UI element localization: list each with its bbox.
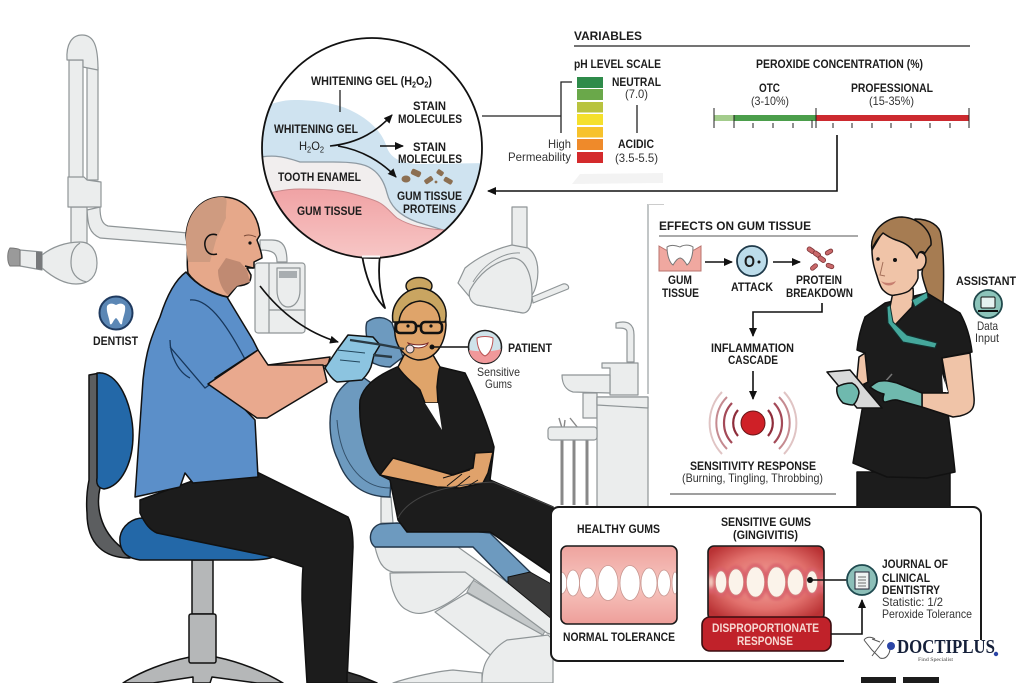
pH scale: (3.5-5.5) [615,151,658,165]
sensitive gums: RESPONSE [737,634,793,648]
panel: magnified callout of whitening gel: GUM TISSUE [297,204,362,218]
dentist icon and label [93,296,139,348]
background: x-ray arm and head [8,35,287,284]
peroxide concentration scale [714,57,969,128]
patient torso [360,367,553,575]
assistant tunic [853,293,972,478]
chair lower base [393,670,482,683]
patient head [395,298,446,360]
pH scale: High [548,137,571,151]
panel: magnified callout of whitening gel: TOOTH ENAMEL [278,170,361,184]
panel: gum comparison [551,507,981,661]
panel: magnified callout of whitening gel: O [311,139,320,153]
dentist instrument and mirror [350,340,404,357]
panel: magnified callout of whitening gel: STAIN [413,140,446,154]
peroxide concentration scale: PEROXIDE CONCENTRATION (%) [756,57,923,71]
peroxide concentration scale: (3-10%) [751,94,789,108]
panel: magnified callout of whitening gel: 2 [320,146,325,154]
pH scale [482,57,661,165]
bottom edge black blocks [861,677,939,683]
dentist icon and label: DENTIST [93,334,139,348]
logo: doctiplus [844,622,1024,683]
assistant label and icon [956,274,1017,345]
dentist figure [135,197,414,683]
sensitive gums: SENSITIVE GUMS [721,515,811,529]
sensitive gums [702,515,831,651]
arrow: concentration to callout [488,135,837,191]
assistant label and icon: Data [977,319,998,333]
arrow: box to mouth [260,286,338,342]
healthy gums: NORMAL TOLERANCE [563,630,675,644]
assistant pen [884,374,892,383]
icon: sensitivity waves [710,392,796,454]
text: inflammation cascade: CASCADE [728,353,778,367]
journal source: DENTISTRY [882,583,940,597]
callout: patient [430,330,553,391]
peroxide concentration scale: OTC [759,81,780,95]
pH scale: (7.0) [625,87,648,101]
chair headrest [366,318,403,367]
text: sensitivity response: SENSITIVITY RESPONSE [690,459,816,473]
icon: protein breakdown: PROTEIN [796,273,842,287]
cross-section layers [262,100,480,257]
badge: disproportionate response [702,617,831,651]
logo: doctiplus: Find Specialist [918,658,954,663]
sensitive gums: (GINGIVITIS) [733,528,798,542]
callout: patient: Gums [485,377,512,391]
assistant hair [872,217,931,258]
icon: protein breakdown [786,246,853,300]
chair backrest [330,375,395,497]
patient mouth [408,343,428,348]
assistant gloves [870,381,922,407]
protein particles [402,168,453,185]
panel: magnified callout of whitening gel: H [299,139,308,153]
text: sensitivity response [682,459,823,485]
patient chair [330,318,553,683]
patient glasses [396,322,442,333]
panel: effects on gum tissue [659,219,858,494]
dentist stool [87,373,283,683]
sensitive gums: DISPROPORTIONATE [712,621,819,635]
chair seat [370,523,530,582]
journal source: Peroxide Tolerance [882,607,972,621]
assistant trousers [857,472,950,509]
pH scale: NEUTRAL [612,75,661,89]
text: inflammation cascade [711,341,794,367]
assistant face [872,228,926,295]
dentist near arm [208,350,327,418]
assistant neck [890,288,913,325]
text: inflammation cascade: INFLAMMATION [711,341,794,355]
icon: gum and teeth: GUM [668,273,692,287]
panel: magnified callout of whitening gel: WHITENING GEL [274,122,358,136]
healthy gums: HEALTHY GUMS [577,522,660,536]
icon: gum and teeth [659,245,701,300]
dentist shirt [135,272,258,497]
stool backrest [97,373,133,489]
icon: protein breakdown: BREAKDOWN [786,286,853,300]
panel: magnified callout of whitening gel: STAIN [413,99,446,113]
heading: variables: VARIABLES [574,29,642,43]
icon: oxygen attack [731,246,773,294]
background: overhead dental lamp [458,173,663,313]
assistant label and icon: Input [975,331,1000,345]
patient arm and hands [380,452,493,488]
assistant label and icon: ASSISTANT [956,274,1017,288]
panel: magnified callout of whitening gel: MOLECULES [398,112,462,126]
dentist head [186,197,262,297]
journal source [807,557,972,634]
callout: patient: Sensitive [477,365,520,379]
dentist far arm [240,350,330,381]
healthy gums [555,522,678,644]
panel: magnified callout of whitening gel [255,38,490,308]
journal source: Statistic: 1/2 [882,595,943,609]
pH scale: pH LEVEL SCALE [574,57,661,71]
patient neck [398,353,440,403]
journal source: CLINICAL [882,571,930,585]
icon: oxygen attack: O [744,252,755,271]
panel: magnified callout of whitening gel: GUM TISSUE [397,189,462,203]
dentist trousers [140,472,353,683]
assistant left forearm [856,353,868,388]
panel: magnified callout of whitening gel: 2 [307,146,312,154]
callout: patient: PATIENT [508,341,553,355]
stool base [123,657,283,683]
callout labels: 2 [412,80,417,90]
journal source: JOURNAL OF [882,557,948,571]
panel: magnified callout of whitening gel: MOLECULES [398,152,462,166]
icon: gum and teeth: TISSUE [662,286,699,300]
stool backrest post [87,373,130,558]
pH scale: ACIDIC [618,137,654,151]
dentist gloves [325,335,380,382]
peroxide concentration scale: PROFESSIONAL [851,81,933,95]
callout tail [362,255,385,308]
patient figure [360,278,553,620]
background: dental sink and cabinet [548,204,664,510]
panel: magnified callout of whitening gel: PROTEINS [403,202,456,216]
peroxide concentration scale: (15-35%) [869,94,914,108]
stool seat [120,518,273,560]
icon: oxygen attack: ATTACK [731,280,773,294]
heading: effects: EFFECTS ON GUM TISSUE [659,219,811,233]
background: wall control box [255,263,305,333]
chair post [381,497,393,523]
callout labels: ) [428,74,432,88]
assistant ponytail [915,219,944,303]
patient foot [508,572,553,620]
callout labels: O [416,74,424,88]
assistant teal collar [887,305,937,348]
reaction arrows [330,115,392,146]
text: sensitivity response: (Burning, Tingling, Throbbing) [682,471,823,485]
logo: doctiplus: DOCTIPLUS [897,636,995,658]
assistant right arm [922,353,974,417]
callout labels: WHITENING GEL (H [311,74,423,88]
callout labels: 2 [424,80,429,90]
assistant tablet [827,370,882,408]
pH scale: Permeability [508,150,571,164]
assistant figure [827,217,974,509]
panel: variables [482,29,970,165]
